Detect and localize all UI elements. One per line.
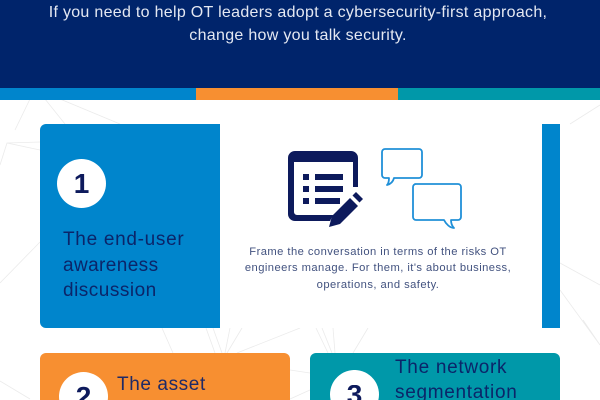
icon: speech bubbles <box>381 148 462 229</box>
panel: card 1 blue label <box>40 124 220 328</box>
icon: checklist with pencil <box>288 151 363 227</box>
panel: card 1 right bar <box>542 124 560 328</box>
card 1 title <box>63 229 184 301</box>
panel: card 2 <box>40 353 290 400</box>
panel: card 1 white body <box>220 124 542 328</box>
number 1 badge <box>57 159 106 208</box>
card 1 description: engineers manage. For them, it's about business, <box>245 262 511 274</box>
number 2 badge <box>59 372 108 400</box>
card 1 title: discussion <box>63 280 157 301</box>
number 1 badge: 1 <box>74 168 89 199</box>
card 1 description: Frame the conversation in terms of the risks OT <box>249 246 507 258</box>
header banner <box>0 0 600 88</box>
card 2 title: The asset <box>117 374 206 395</box>
header text <box>49 4 547 44</box>
panel: card 3 <box>310 353 560 400</box>
header text: If you need to help OT leaders adopt a cybersecurity-first approach, <box>49 4 547 21</box>
card 1 description: operations, and safety. <box>317 279 439 291</box>
card 3 title line 1: The network <box>395 357 507 378</box>
colour stripe <box>0 88 600 100</box>
card 1 description <box>245 246 511 291</box>
card 1 title: awareness <box>63 254 158 276</box>
card 1 title: The end-user <box>63 229 184 250</box>
number 3 badge <box>330 370 379 400</box>
header text: change how you talk security. <box>189 27 407 44</box>
